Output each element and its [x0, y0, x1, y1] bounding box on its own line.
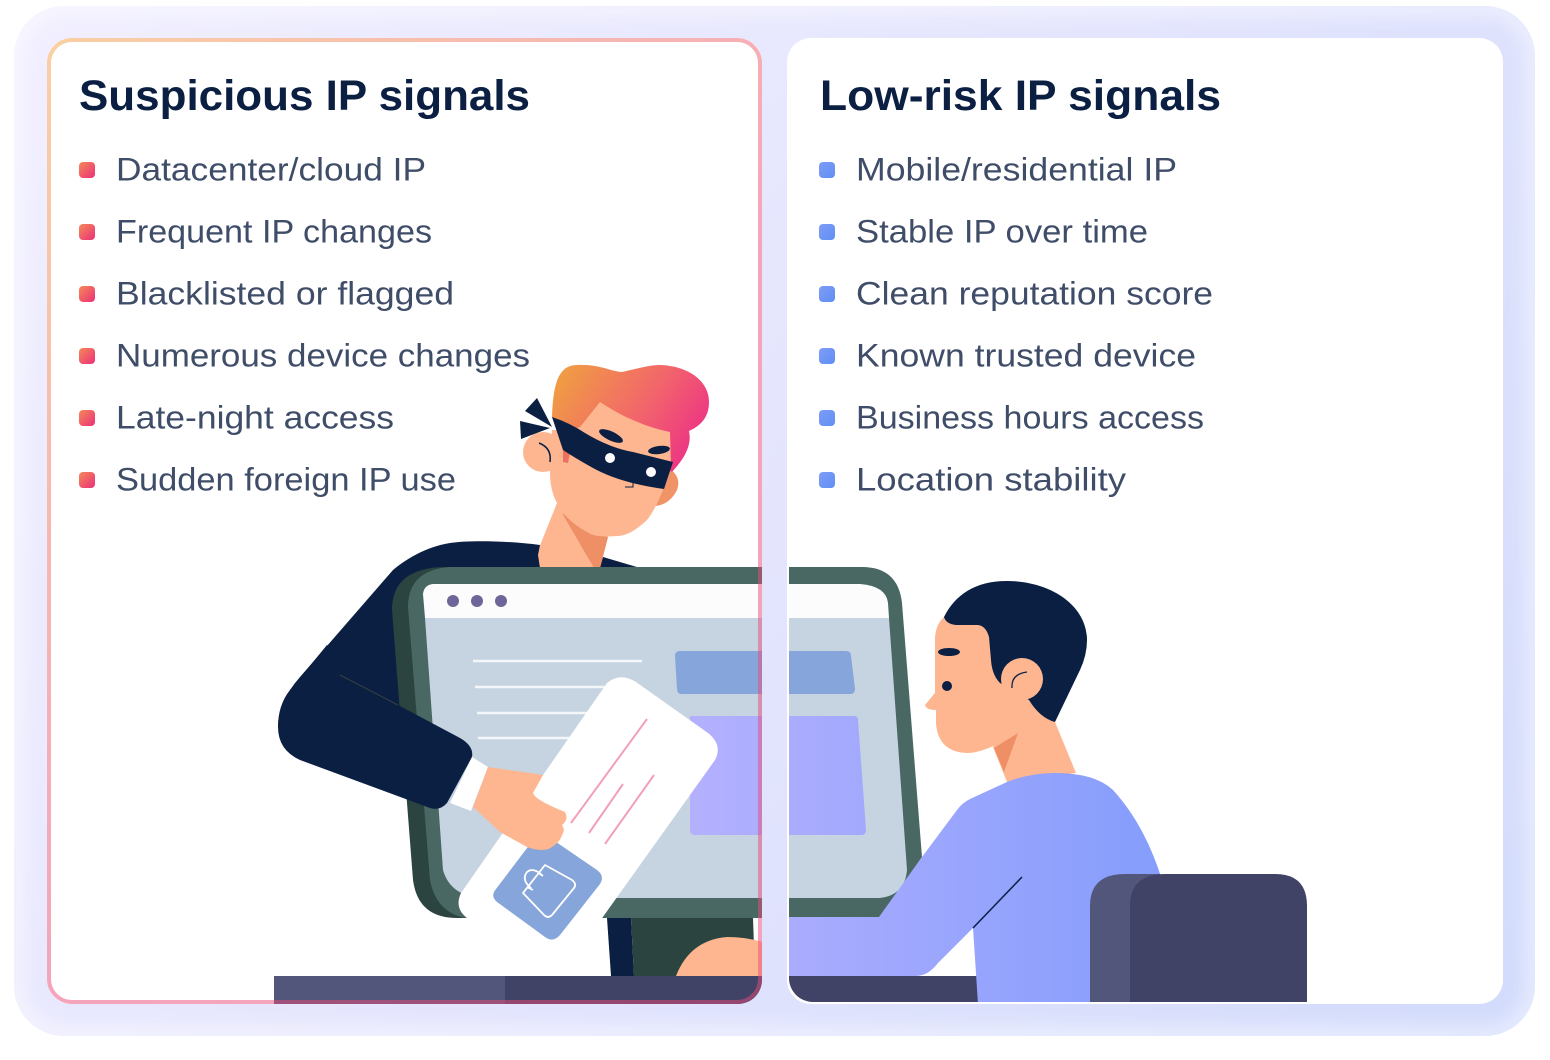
low-risk signals list: Clean reputation score	[856, 276, 1213, 312]
low-risk heading: Low-risk IP signals	[820, 72, 1221, 120]
thief head and torso	[278, 365, 709, 727]
suspicious signals list	[79, 152, 530, 498]
chair	[1090, 874, 1307, 1004]
low-risk signals list: Mobile/residential IP	[856, 152, 1177, 188]
suspicious card gradient border	[49, 40, 760, 1002]
worker shirt and arm	[787, 773, 1162, 1004]
office worker	[787, 581, 1162, 1004]
paper lines	[571, 719, 654, 844]
suspicious signals list: Sudden foreign IP use	[116, 462, 456, 498]
low-risk signals list	[819, 152, 1213, 498]
panel: low-risk card	[787, 38, 1503, 1004]
suspicious signals list: Blacklisted or flagged	[116, 276, 454, 312]
suspicious signals list: Datacenter/cloud IP	[116, 152, 426, 188]
suspicious signals list: Frequent IP changes	[116, 214, 432, 250]
low-risk signals list: Location stability	[856, 462, 1126, 498]
shopping bag tile icon	[493, 831, 602, 940]
thief legs and knee	[607, 918, 763, 976]
suspicious heading: Suspicious IP signals	[79, 72, 530, 120]
suspicious signals list: Numerous device changes	[116, 338, 530, 374]
paper document	[459, 677, 718, 960]
worker neck	[993, 700, 1076, 782]
computer monitor	[392, 567, 922, 918]
thief arm	[278, 645, 488, 811]
thief hand	[473, 767, 566, 850]
low-risk signals list: Business hours access	[856, 400, 1204, 436]
desk	[274, 976, 982, 1006]
low-risk signals list: Stable IP over time	[856, 214, 1148, 250]
panel: suspicious card	[47, 38, 762, 1004]
worker face	[925, 617, 1040, 753]
suspicious signals list: Late-night access	[116, 400, 394, 436]
low-risk signals list: Known trusted device	[856, 338, 1196, 374]
illustration clipped to both cards	[274, 365, 1307, 1006]
worker hair	[944, 581, 1087, 722]
